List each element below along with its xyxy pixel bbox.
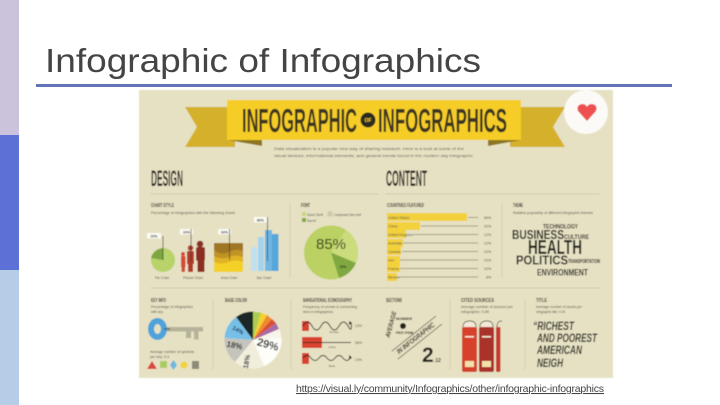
horizontal bar chart: 12% — [484, 242, 492, 246]
horizontal bar chart: 10% — [484, 258, 492, 262]
navigation bars and lines: 13% — [355, 358, 362, 362]
banner title: INFOGRAPHICS — [378, 102, 507, 139]
source link: https://visual.ly/community/Infographics/other/infographic-infographics — [296, 383, 604, 395]
sections badge: PER ITEM — [396, 331, 413, 335]
bar chart icon: Bar Chart — [257, 276, 271, 280]
base colour pie chart: 18% — [243, 353, 252, 369]
panel: theme word cloud: BUSINESS — [512, 227, 564, 242]
area chart icon — [214, 229, 243, 280]
panel: key info: with key — [151, 310, 163, 314]
panel: font — [301, 203, 361, 280]
horizontal bar chart: 10% — [484, 250, 492, 254]
horizontal bar chart: China — [388, 224, 397, 228]
horizontal bar chart: 12% — [484, 233, 492, 237]
panel: chart style: Percentage of infographics with the following charts — [151, 211, 235, 215]
bar chart icon: 80% — [257, 218, 265, 222]
banner title: INFOGRAPHIC — [242, 102, 357, 139]
sample title quote: AND POOREST — [536, 333, 598, 345]
horizontal bar chart — [387, 213, 492, 281]
panel: theme word cloud: TRANSPORTATION — [568, 259, 600, 265]
sections badge: AVERAGE — [384, 310, 399, 339]
panel: cited sources: CITED SOURCES — [461, 298, 495, 304]
horizontal bar chart: 32% — [484, 224, 492, 228]
panel: navigational iconography: Frequency of arrows & connecting — [303, 305, 357, 309]
navigation bars and lines: Both — [329, 364, 335, 368]
panel: navigational iconography — [302, 298, 362, 368]
panel: chart style: CHART STYLE — [151, 203, 174, 209]
navigation bars and lines: 58% — [355, 341, 362, 345]
panel: title — [533, 298, 598, 370]
sections badge: 2 — [422, 344, 434, 367]
icon: heart badge — [564, 90, 608, 134]
panel: navigational iconography: lines in infographics — [303, 310, 333, 314]
horizontal bar chart: 8% — [486, 276, 492, 280]
panel: theme word cloud: ENVIRONMENT — [537, 268, 588, 278]
panel: title: TITLE — [536, 298, 548, 304]
panel: sections — [384, 298, 442, 367]
panel: theme word cloud: CULTURE — [564, 234, 590, 241]
panel: key info: Average number of symbols — [150, 350, 194, 354]
horizontal bar chart: 86% — [484, 216, 492, 220]
title: Infographic of Infographics — [45, 42, 481, 79]
sections badge — [384, 310, 442, 367]
horizontal bar chart: United States — [388, 216, 410, 220]
base colour pie chart: 18% — [226, 339, 243, 352]
sample title quote: NEIGH — [537, 358, 563, 370]
panel: theme word cloud: THEME — [513, 203, 523, 209]
icon: books — [462, 321, 502, 372]
panel: navigational iconography: NAVIGATIONAL ICONOGRAPHY — [303, 298, 352, 304]
picture chart icon — [180, 229, 205, 280]
navigation bars and lines: 13% — [355, 324, 362, 328]
panel: base color pie — [224, 298, 282, 369]
font pie chart — [304, 226, 358, 280]
bar chart icon — [251, 217, 278, 280]
horizontal bar chart: Mexico — [388, 276, 399, 280]
sections badge: .12 — [434, 358, 441, 364]
picture chart icon: 24% — [183, 230, 191, 234]
panel: theme word cloud: Relative popularity of different infographic themes — [513, 211, 593, 215]
sample title quote: AMERICAN — [536, 345, 582, 357]
horizontal bar chart: United Kingdom — [388, 233, 414, 237]
panel: font: FONT — [301, 203, 310, 209]
panel: key info: per key: 5.3 — [150, 355, 169, 359]
intro text: Data visualization is a popular new way of sharing research. Here is a look at some of the — [274, 147, 464, 151]
area chart icon: Area Chart — [221, 276, 237, 280]
picture chart icon: Picture Chart — [183, 276, 203, 280]
intro text — [274, 147, 474, 158]
sections badge: IN INFOGRAPHIC — [396, 321, 437, 356]
panel: base color pie: BASE COLOR — [225, 298, 247, 304]
panel: chart style — [147, 203, 278, 280]
panel: key info: Percentage of infographics — [151, 305, 193, 309]
area chart icon: 34% — [221, 230, 229, 234]
horizontal bar chart: France — [388, 267, 399, 271]
base colour pie chart: 14% — [231, 326, 245, 337]
horizontal bar chart: Iran — [388, 258, 394, 262]
panel: cited sources: infographic: 0.85 — [461, 310, 489, 314]
navigation bars and lines: Lines — [328, 345, 336, 349]
navigation bars and lines: Arrows — [329, 330, 339, 334]
sidebar colour blocks — [0, 0, 19, 405]
horizontal bar chart: Australia — [388, 242, 402, 246]
infographic image panel: CONTENT — [386, 166, 427, 191]
horizontal bar chart: 10% — [484, 267, 492, 271]
panel: title: Average number of words per — [536, 305, 583, 309]
intro text: visual devices, informational elements, and general trends found in the modern day infographic. — [274, 154, 474, 158]
sample title quote — [533, 321, 598, 370]
sample title quote: “RICHEST — [533, 321, 575, 333]
panel: countries featured — [387, 203, 492, 281]
infographic image panel — [139, 90, 613, 378]
panel: theme word cloud — [512, 203, 600, 278]
font pie chart: 15% — [339, 265, 347, 269]
panel: cited sources — [461, 298, 514, 372]
font legend: Serif — [307, 219, 316, 223]
pie chart icon — [147, 233, 175, 280]
title rule — [36, 84, 672, 87]
horizontal bar chart: Canada — [388, 250, 401, 254]
font legend: Compressed Sans Serif — [334, 213, 361, 217]
panel: theme word cloud: HEALTH — [528, 237, 582, 259]
banner title: OF — [365, 118, 371, 124]
font legend: Sans Serif — [307, 213, 323, 217]
infographic image panel: DESIGN — [151, 166, 183, 191]
panel: sections: SECTIONS — [386, 298, 402, 304]
panel: theme word cloud: POLITICS — [516, 252, 568, 268]
panel: key info: KEY INFO — [151, 298, 166, 304]
navigation bars and lines — [302, 321, 362, 368]
panel: title: infographic title: 4.34 — [536, 310, 565, 314]
font pie chart: 85% — [316, 236, 346, 253]
banner ribbon — [185, 100, 565, 147]
panel: key info — [147, 298, 203, 370]
base colour pie chart — [224, 311, 282, 369]
base colour pie chart: 29% — [256, 336, 280, 354]
pie chart icon: Pie Chart — [155, 276, 169, 280]
sections badge: NUMBER — [396, 317, 412, 321]
font legend — [302, 212, 361, 223]
panel: theme word cloud: TECHNOLOGY — [543, 224, 578, 230]
icon: key: 70% — [164, 327, 170, 331]
symbol icons — [147, 360, 199, 370]
panel: cited sources: Average number of sources per — [461, 305, 514, 309]
pie chart icon: 23% — [150, 234, 158, 238]
panel: countries featured: COUNTRIES FEATURED — [387, 203, 424, 209]
